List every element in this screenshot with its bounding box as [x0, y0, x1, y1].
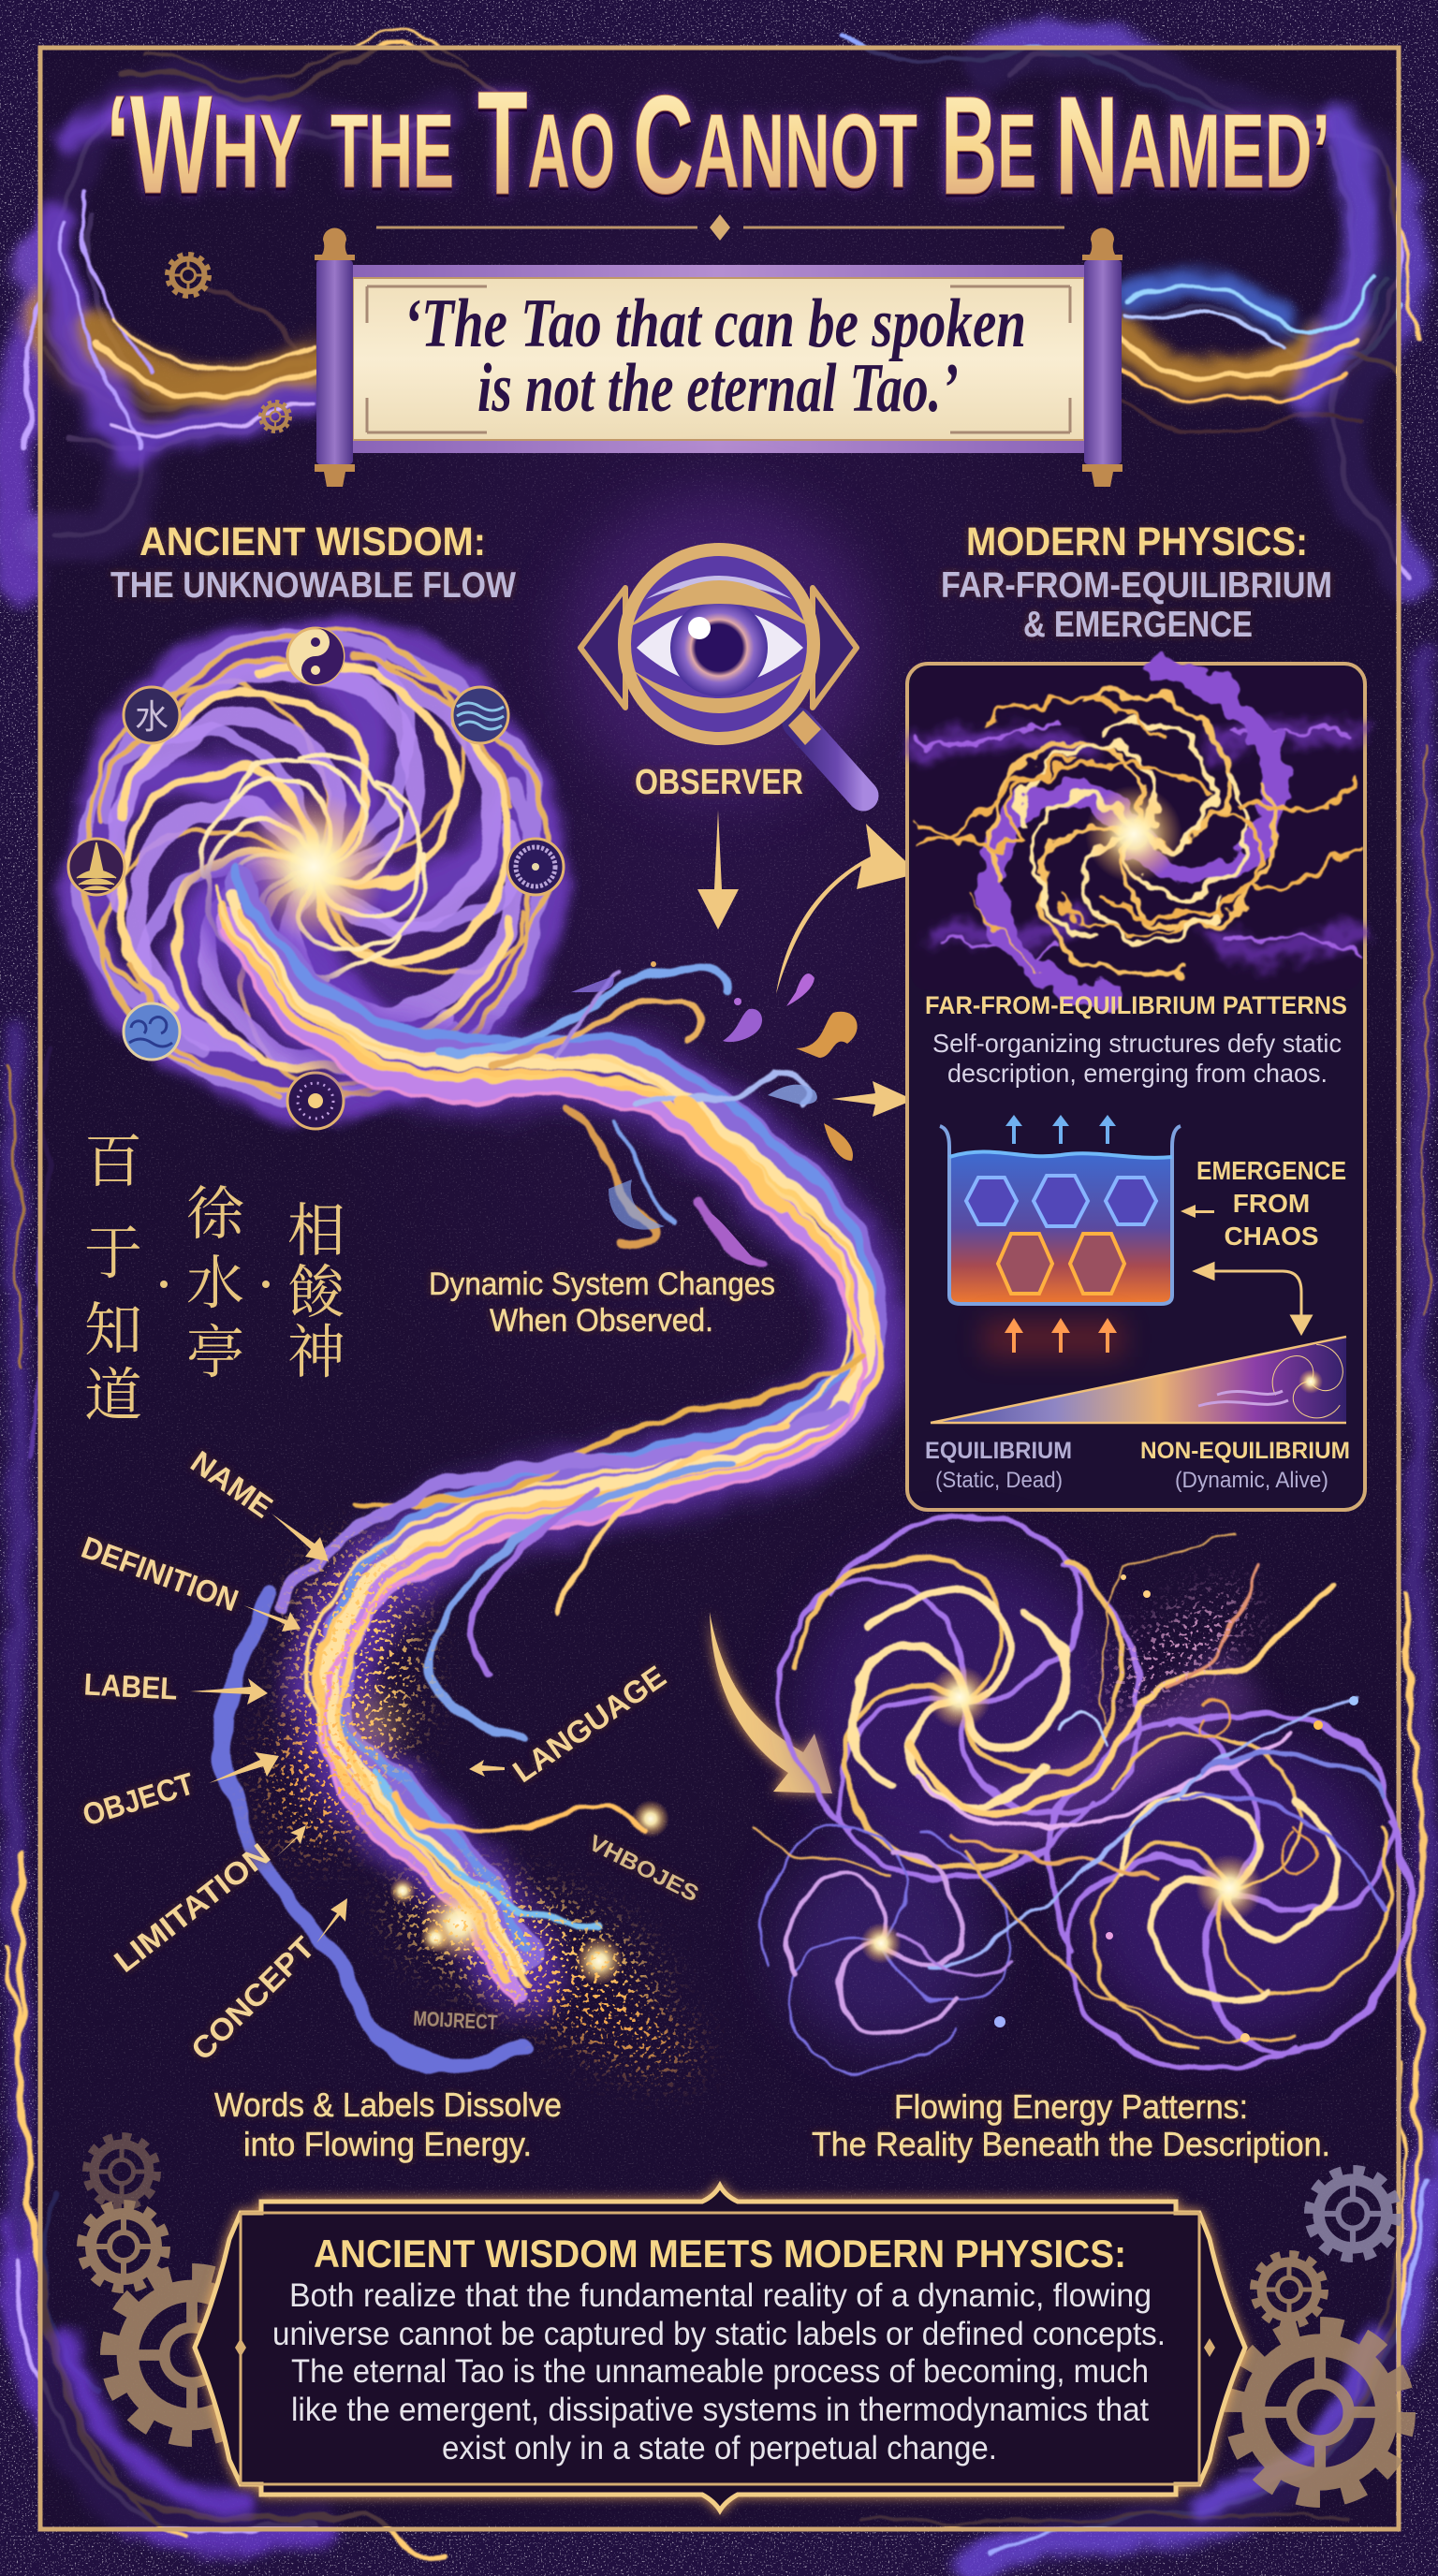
right roller	[1082, 228, 1123, 487]
summary body: The eternal Tao is the unnameable process of becoming, much	[291, 2353, 1149, 2390]
title: N	[1055, 66, 1156, 224]
calligraphy: 餕	[287, 1246, 345, 1329]
quote text: is not the eternal Tao.’	[477, 350, 959, 427]
caption: flowing energy patterns: The Reality Beneath the Description.	[812, 2125, 1330, 2163]
caption: words and labels: into Flowing Energy.	[243, 2125, 532, 2163]
icon: glyph circle: 水	[135, 690, 169, 739]
title: ANNOT	[694, 93, 917, 210]
heading: modern physics	[941, 520, 1332, 645]
title: B	[941, 66, 1042, 224]
panel description: Self-organizing structures defy static	[932, 1029, 1342, 1058]
flowing energy patterns	[719, 1492, 1438, 2128]
panel heading: FAR-FROM-EQUILIBRIUM PATTERNS	[925, 991, 1347, 1019]
caption: words and labels: Words & Labels Dissolve	[214, 2086, 562, 2124]
label: label: LABEL	[83, 1666, 179, 1706]
emergence label: CHAOS	[1224, 1222, 1319, 1251]
heading: modern physics: MODERN PHYSICS:	[966, 520, 1308, 564]
arrow: curve to panel	[776, 824, 918, 994]
swirl b	[990, 1648, 1438, 2128]
summary body: universe cannot be captured by static labels or defined concepts.	[272, 2316, 1166, 2352]
title: HY	[213, 93, 302, 210]
convection beaker diagram	[940, 1115, 1181, 1357]
calligraphy: 知	[84, 1283, 142, 1367]
title: T	[477, 61, 568, 226]
heading: modern physics: FAR-FROM-EQUILIBRIUM	[941, 565, 1332, 606]
icon: mountain	[68, 839, 125, 895]
equilibrium wedge	[931, 1337, 1351, 1423]
double arrow	[1196, 1264, 1311, 1333]
caption: flowing energy patterns: Flowing Energy Patterns:	[894, 2087, 1248, 2126]
observer label: OBSERVER	[635, 763, 803, 802]
label: concept: CONCEPT	[184, 1930, 321, 2067]
arrow: concept	[316, 1898, 347, 1943]
summary box	[195, 2186, 1245, 2510]
summary body	[272, 2277, 1166, 2466]
heat arrows	[1005, 1318, 1117, 1353]
title: C	[633, 66, 734, 223]
emergence label: FROM	[1233, 1189, 1310, 1218]
title: ‘W	[106, 66, 277, 223]
outer ring strands	[98, 660, 524, 1095]
calligraphy: 徐	[186, 1167, 244, 1251]
summary body: like the emergent, dissipative systems in thermodynamics that	[291, 2392, 1149, 2428]
sparkle particles	[267, 1544, 1265, 2091]
label arrows	[190, 1514, 505, 1943]
right branches	[571, 1076, 811, 1259]
swirl a	[755, 1492, 1165, 1904]
title: AO	[528, 93, 615, 210]
arrow: language	[469, 1760, 505, 1777]
word labels dissolving	[77, 1444, 703, 2067]
gear decor: bottom left	[82, 2137, 272, 2436]
calligraphy	[84, 1115, 345, 1432]
label: limitation: LIMITATION	[108, 1837, 276, 1979]
arrow: name	[271, 1514, 329, 1561]
label: object: OBJECT	[79, 1765, 198, 1833]
quote text: ‘The Tao that can be spoken	[404, 285, 1026, 362]
magnifier handle	[788, 710, 863, 796]
title divider	[376, 214, 1064, 241]
title: THE	[330, 93, 454, 210]
swirl arms	[21, 567, 613, 1165]
calligraphy: 水	[186, 1237, 244, 1320]
observer eye magnifier	[565, 491, 873, 800]
text: dynamic system	[429, 1266, 775, 1339]
arrow: down to flowing patterns	[710, 1612, 832, 1793]
quote text	[404, 285, 1026, 427]
label: dissolving word bottom: MOIJRECT	[413, 2007, 498, 2034]
arrow: limitation	[276, 1825, 306, 1857]
calligraphy: 神	[287, 1306, 345, 1389]
calligraphy: 相	[287, 1184, 345, 1267]
energy stream	[215, 867, 880, 2065]
summary body: Both realize that the fundamental reality of a dynamic, flowing	[289, 2277, 1152, 2314]
bright bloom	[348, 1696, 669, 1985]
equilibrium label: (Static, Dead)	[935, 1468, 1063, 1493]
heading: ancient wisdom: THE UNKNOWABLE FLOW	[110, 565, 516, 606]
text: dynamic system: When Observed.	[490, 1303, 713, 1339]
emergence label: EMERGENCE	[1196, 1156, 1346, 1185]
non-equilibrium label: NON-EQUILIBRIUM	[1140, 1438, 1350, 1464]
emergence label	[1196, 1156, 1346, 1251]
panel description	[932, 1029, 1342, 1088]
swirl c	[719, 1798, 1020, 2100]
convection cells cool	[966, 1176, 1156, 1226]
lower branches	[225, 1357, 861, 2065]
summary body: exist only in a state of perpetual change.	[442, 2430, 997, 2466]
arrow: label	[190, 1678, 268, 1705]
calligraphy: 百	[84, 1115, 142, 1198]
emergence arrow	[1181, 1205, 1214, 1218]
icon: ring	[507, 839, 564, 895]
swirl cores	[860, 1574, 1358, 2042]
arrow: definition	[243, 1605, 301, 1632]
cooling arrows	[1005, 1115, 1116, 1144]
arrow: stream to panel	[831, 1081, 914, 1117]
icon: yin yang	[287, 628, 344, 684]
calligraphy: 亭	[186, 1306, 244, 1389]
arrow: observer down	[697, 810, 739, 929]
title	[106, 61, 1330, 226]
gear decor: top left	[168, 255, 290, 432]
icon: water waves	[452, 687, 508, 743]
left roller	[315, 228, 355, 487]
equilibrium label: EQUILIBRIUM	[925, 1438, 1072, 1464]
label: language: LANGUAGE	[506, 1659, 672, 1789]
non-equilibrium label	[1140, 1438, 1350, 1493]
title: E	[997, 93, 1036, 210]
text: dynamic system: Dynamic System Changes	[429, 1266, 775, 1302]
non-equilibrium label: (Dynamic, Alive)	[1175, 1468, 1328, 1493]
connecting strands	[749, 1535, 1386, 2037]
icon: glyph circle	[124, 687, 180, 743]
droplets	[571, 961, 858, 1266]
label: definition: DEFINITION	[77, 1530, 242, 1618]
heading: modern physics: & EMERGENCE	[1023, 605, 1253, 645]
label: dissolving word right: VHBOJES	[584, 1830, 703, 1907]
calligraphy: 于	[84, 1207, 142, 1290]
quote scroll	[315, 228, 1123, 487]
icon: blue wave	[124, 1003, 180, 1060]
caption: flowing energy patterns	[812, 2087, 1330, 2163]
panel: modern physics	[907, 642, 1365, 1510]
panel image: far-from-equilibrium swirl	[911, 642, 1361, 1026]
arrow: object	[209, 1752, 279, 1783]
panel description: description, emerging from chaos.	[947, 1059, 1328, 1088]
equilibrium label	[925, 1438, 1072, 1493]
gear decor: bottom right	[1236, 2171, 1404, 2496]
heading: ancient wisdom: ANCIENT WISDOM:	[139, 520, 486, 564]
label: name: NAME	[184, 1444, 279, 1525]
icon: radiant sun	[287, 1073, 344, 1129]
swirl: ancient wisdom flow	[21, 567, 613, 1165]
caption: words and labels	[214, 2086, 562, 2163]
upper wave branch	[440, 961, 726, 1067]
heading: ancient wisdom	[110, 520, 516, 606]
convection cells hot	[998, 1234, 1124, 1294]
calligraphy: 道	[84, 1349, 142, 1432]
summary heading: ANCIENT WISDOM MEETS MODERN PHYSICS:	[314, 2232, 1126, 2276]
